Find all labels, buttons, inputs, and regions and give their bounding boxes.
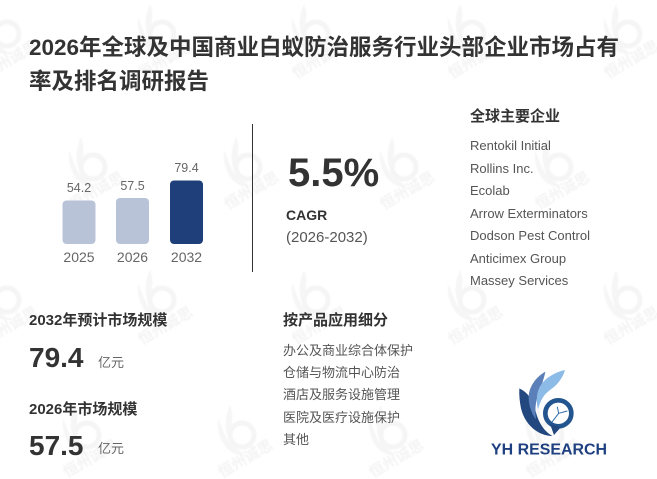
unit: 亿元 — [98, 441, 124, 456]
background watermark pattern: 恒州诚思 — [135, 37, 196, 82]
application list: 仓储与物流中心防治 — [283, 365, 400, 380]
CAGR label: CAGR — [286, 207, 327, 223]
title: 2026年全球及中国商业白蚁防治服务行业头部企业市场占有 — [29, 35, 619, 60]
bar 2025 — [62, 181, 96, 265]
unit: 亿元 — [98, 355, 124, 370]
company list: Rentokil Initial — [470, 138, 551, 153]
value: 2026 market size: 57.5 — [29, 430, 84, 461]
company list: Massey Services — [470, 273, 568, 288]
bar 2032: 79.4 — [174, 161, 199, 175]
bar 2025: 54.2 — [67, 181, 91, 195]
heading: 2026 market size: 2026年市场规模 — [29, 401, 137, 418]
bar 2025: 2025 — [63, 249, 95, 265]
value: 2032 market size: 79.4 — [29, 342, 84, 373]
title: 率及排名调研报告 — [29, 69, 209, 94]
company list: Arrow Exterminators — [470, 206, 588, 221]
company list: Anticimex Group — [470, 251, 566, 266]
logo: YH Research: YH RESEARCH — [491, 442, 607, 458]
background watermark pattern: 恒州诚思 — [445, 37, 506, 82]
application list: 办公及商业综合体保护 — [283, 343, 413, 358]
background watermark pattern: 恒州诚思 — [135, 303, 196, 348]
heading: global key companies: 全球主要企业 — [470, 108, 560, 125]
background watermark pattern: 恒州诚思 — [66, 168, 127, 213]
bar 2032 — [170, 161, 203, 265]
heading: application segments: 按产品应用细分 — [283, 312, 388, 329]
company list: Rollins Inc. — [470, 161, 534, 176]
background watermark pattern: 恒州诚思 — [445, 303, 506, 348]
bar 2026 — [116, 179, 149, 265]
background watermark pattern: 恒州诚思 — [377, 168, 438, 213]
application list: 其他 — [283, 432, 309, 447]
bar 2032: 2032 — [171, 249, 202, 265]
application list: 酒店及服务设施管理 — [283, 387, 400, 402]
CAGR period: (2026-2032) — [286, 229, 368, 246]
background watermark pattern: 恒州诚思 — [289, 303, 350, 348]
title — [29, 35, 619, 94]
background watermark pattern: 恒州诚思 — [289, 37, 350, 82]
heading: 2032 forecast market size: 2032年预计市场规模 — [29, 312, 167, 329]
bar 2026: 2026 — [117, 249, 148, 265]
bar 2026: 57.5 — [120, 179, 145, 193]
background watermark pattern: 恒州诚思 — [221, 168, 282, 213]
background watermark pattern: 恒州诚思 — [532, 168, 593, 213]
company list: Ecolab — [470, 183, 510, 198]
CAGR value: 5.5% — [288, 151, 379, 195]
company list: Dodson Pest Control — [470, 228, 590, 243]
application list: 医院及医疗设施保护 — [283, 410, 400, 425]
company list — [470, 138, 590, 288]
